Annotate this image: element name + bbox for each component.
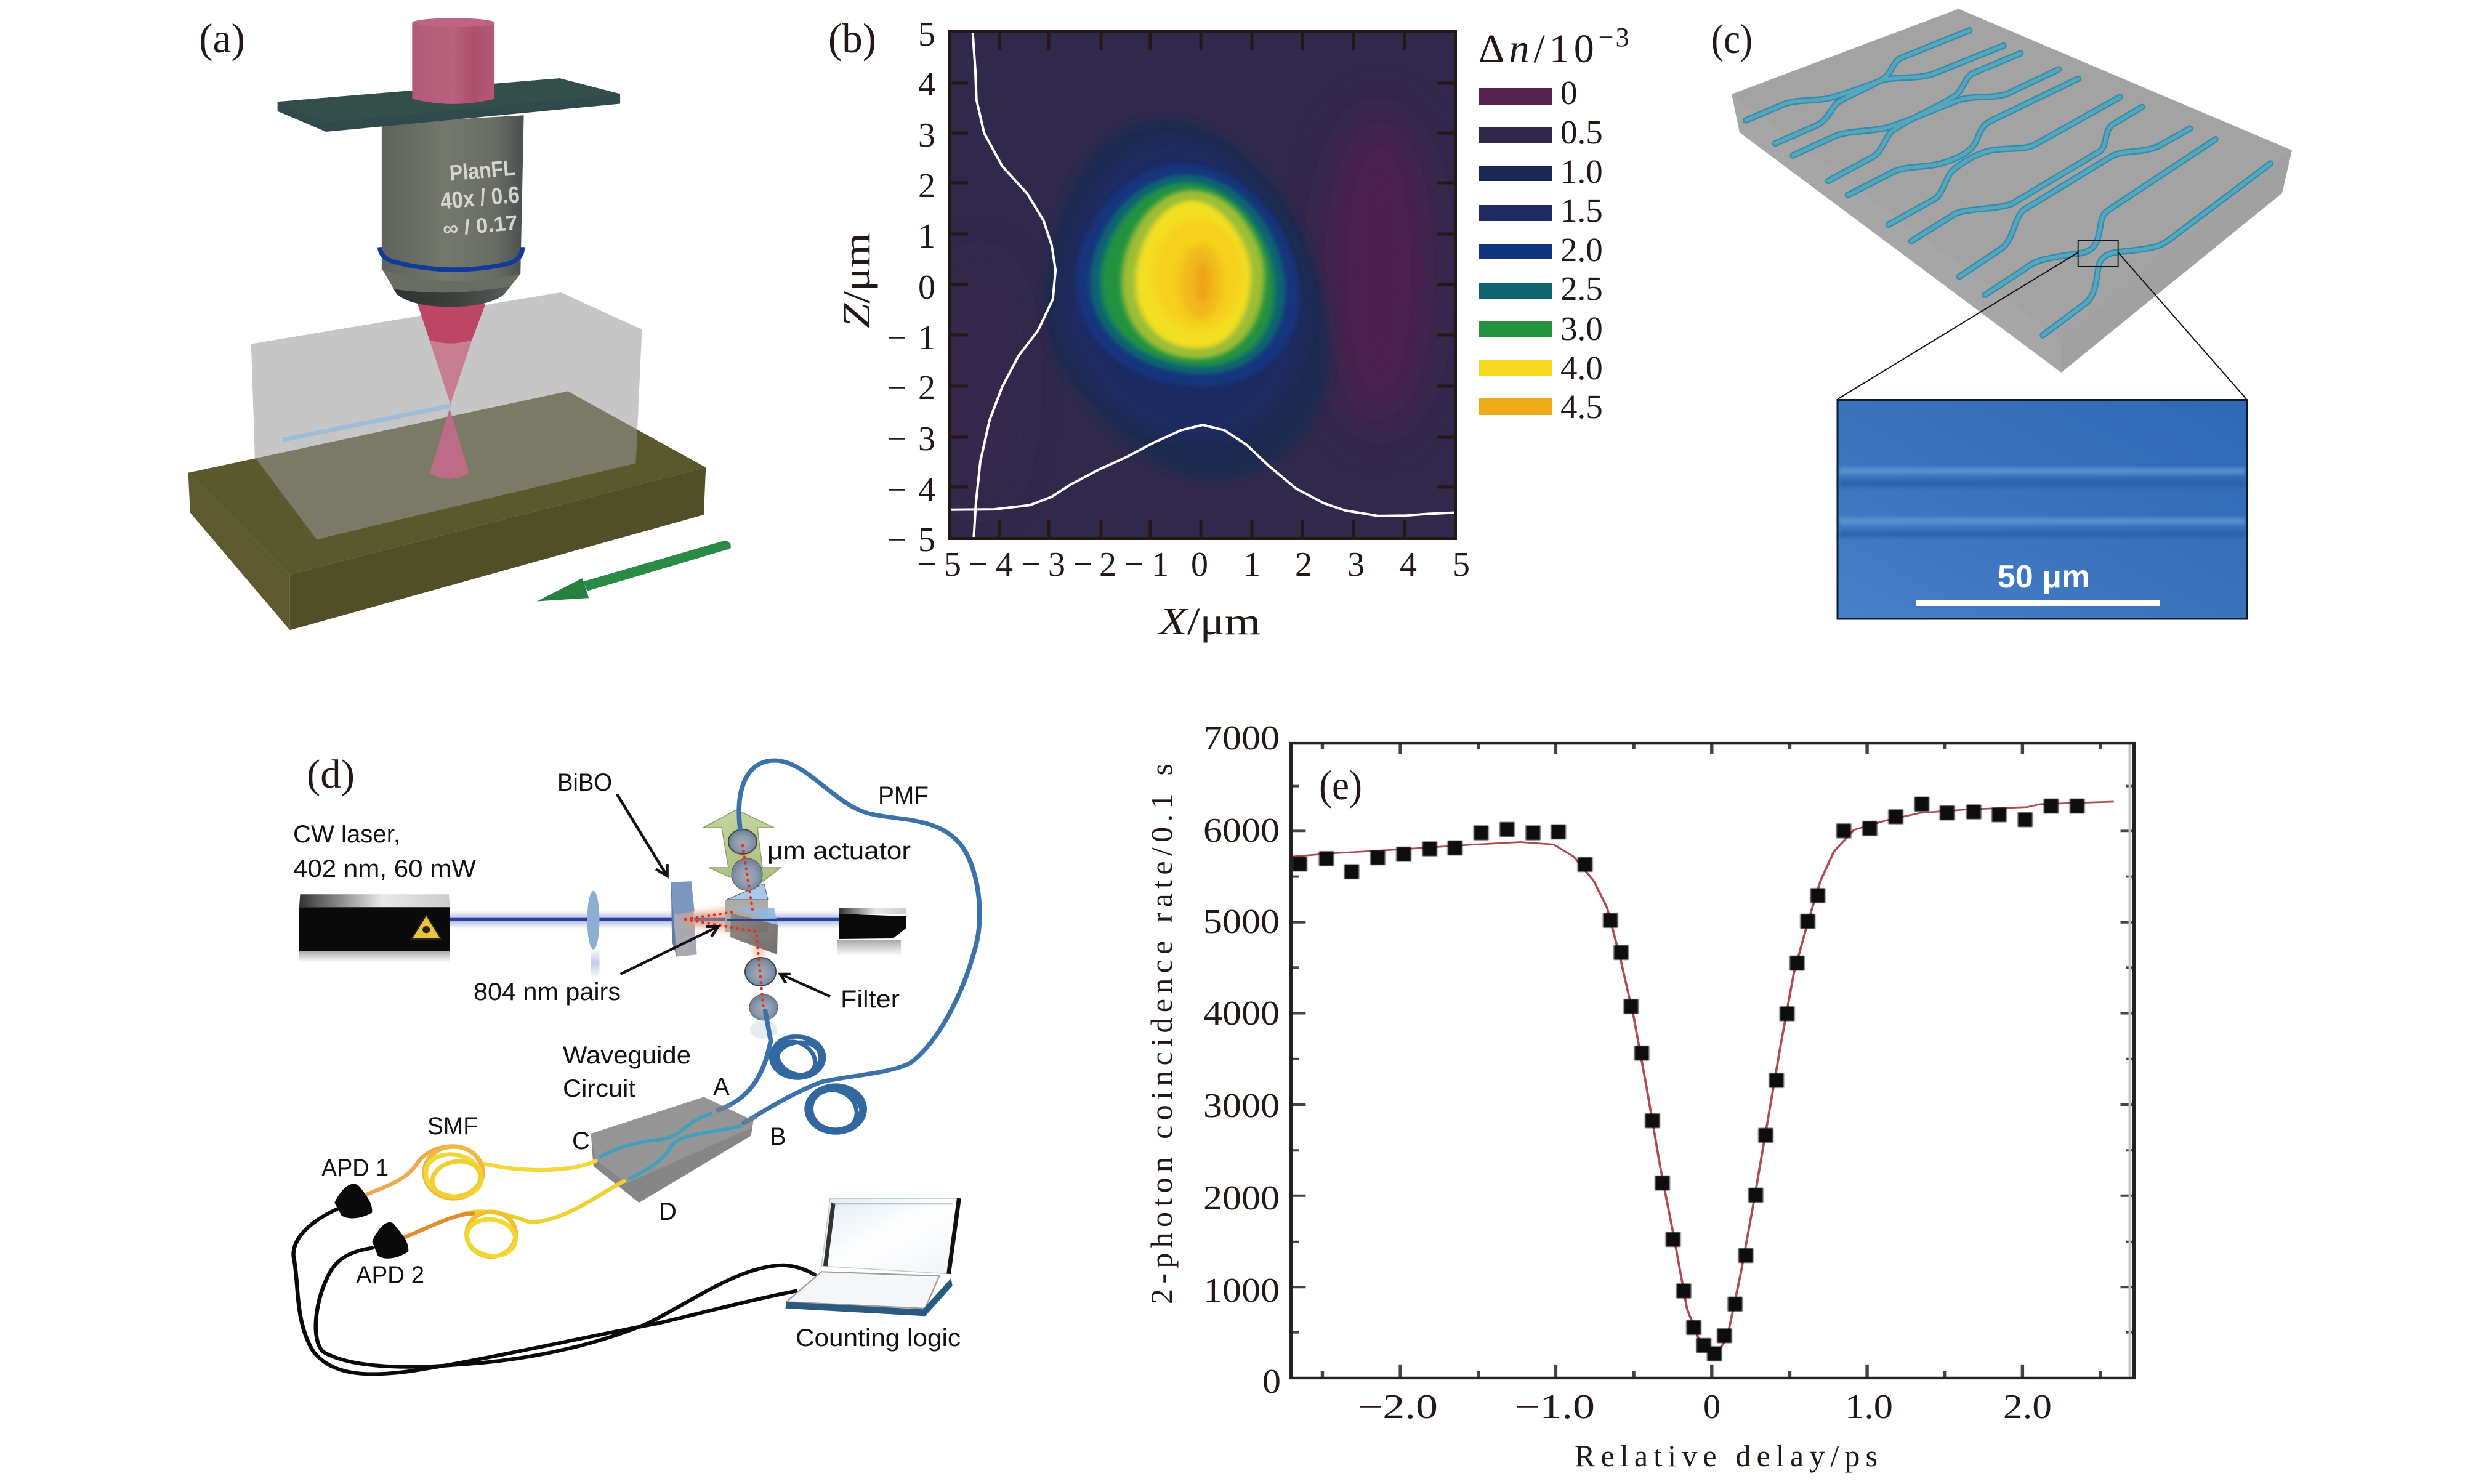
y axis tick labels: 3000 xyxy=(1203,1087,1280,1125)
laptop counting logic xyxy=(785,1198,961,1316)
Z axis tick labels: 3 xyxy=(918,116,935,155)
setup labels: APD 2 xyxy=(356,1262,424,1289)
white intensity profile curves xyxy=(948,31,1455,538)
X axis tick labels: −4 xyxy=(969,546,1013,584)
legend xyxy=(1479,22,1631,425)
804 nm photon paths xyxy=(685,845,764,1010)
focused laser beam xyxy=(418,304,485,479)
setup labels: D xyxy=(659,1198,677,1225)
PMF fibers and coils xyxy=(718,760,980,1140)
panel (a): femtosecond laser writing setup xyxy=(188,15,731,630)
y axis tick labels: 2000 xyxy=(1203,1179,1280,1217)
arrow: 804 nm pointer xyxy=(621,927,718,974)
waveguide array xyxy=(1746,30,2270,335)
setup labels: SMF xyxy=(427,1113,478,1140)
X axis tick labels: 1 xyxy=(1243,546,1261,584)
coupling lenses and filter xyxy=(728,829,778,1039)
objective engraving xyxy=(439,155,521,241)
green dichroic plate xyxy=(278,78,620,132)
black signal cables xyxy=(294,1209,815,1374)
waveguide circuit block xyxy=(591,1097,753,1203)
x axis tick labels: −2.0 xyxy=(1358,1388,1438,1426)
setup labels: μm actuator xyxy=(767,837,911,865)
focusing lens xyxy=(587,891,599,978)
setup labels: 804 nm pairs xyxy=(474,978,621,1006)
scale bar text: 50 μm xyxy=(1998,559,2090,595)
beam dump xyxy=(837,908,906,956)
Z axis tick labels: 2 xyxy=(918,167,935,205)
y axis title: 2-photon coincidence rate/0.1 s xyxy=(1144,764,1179,1304)
laser, lens and crystal on the pump line xyxy=(299,881,841,978)
panel label (c): (c) xyxy=(1711,15,1753,62)
X axis tick labels xyxy=(917,546,1470,584)
y axis tick labels: 5000 xyxy=(1203,903,1280,941)
y axis tick labels: 1000 xyxy=(1203,1272,1280,1310)
setup labels: A xyxy=(713,1073,730,1100)
microscope inset xyxy=(1838,400,2247,619)
legend values: 0 xyxy=(1560,74,1578,111)
Z axis tick labels: 4 xyxy=(918,65,935,103)
panel label (e): (e) xyxy=(1319,762,1362,809)
y axis tick labels: 6000 xyxy=(1203,812,1280,850)
stage block xyxy=(188,391,706,630)
legend swatches xyxy=(1479,88,1552,415)
x axis tick labels: 1.0 xyxy=(1845,1388,1893,1426)
objective engraving: ∞ / 0.17 xyxy=(442,211,518,241)
glass chip with waveguides xyxy=(1732,9,2292,399)
BiBO crystal xyxy=(671,881,697,957)
green translation arrow xyxy=(537,540,731,601)
fit curve xyxy=(1291,802,2114,1358)
setup labels xyxy=(293,769,961,1352)
dark outer contour xyxy=(1045,118,1330,480)
setup labels: C xyxy=(572,1127,590,1155)
legend values: 1.5 xyxy=(1560,192,1603,229)
X axis tick labels: 5 xyxy=(1453,546,1470,584)
setup labels: Counting logic xyxy=(796,1325,961,1352)
x axis tick labels: 0 xyxy=(1703,1388,1721,1426)
microscope objective xyxy=(380,115,524,307)
glass sample block xyxy=(251,292,642,539)
Z axis tick labels: 5 xyxy=(918,15,935,54)
legend values: 2.0 xyxy=(1560,231,1603,268)
contour map xyxy=(945,31,1456,539)
legend values: 2.5 xyxy=(1560,270,1603,307)
panel label (d): (d) xyxy=(307,752,355,797)
legend title: −3 xyxy=(1599,22,1631,52)
data points xyxy=(1293,797,2084,1361)
X axis title: X/μm xyxy=(1156,601,1261,643)
orange core xyxy=(1153,218,1243,331)
X axis tick labels: 0 xyxy=(1191,546,1208,584)
y axis tick labels: 0 xyxy=(1262,1363,1281,1401)
x axis tick labels: −1.0 xyxy=(1515,1388,1595,1426)
illustration: objective, sample and stage xyxy=(188,18,731,630)
X axis tick labels: −2 xyxy=(1073,546,1116,584)
mid blue contour xyxy=(1063,139,1305,441)
Z axis tick labels: −2 xyxy=(887,369,935,407)
green contour xyxy=(1095,179,1280,370)
panel (d): HOM experiment setup xyxy=(293,752,980,1374)
Z axis tick labels: −5 xyxy=(887,521,935,559)
legend title: Δn/10 xyxy=(1479,26,1599,71)
legend values: 3.0 xyxy=(1560,310,1603,347)
fiber stubs at chip ports A and B xyxy=(717,1105,756,1123)
Z axis tick labels: −1 xyxy=(887,319,935,357)
SMF fibers and coils xyxy=(368,1146,624,1260)
APD detectors xyxy=(334,1184,408,1259)
yellow contour xyxy=(1129,195,1257,353)
Z axis tick labels: −3 xyxy=(887,420,935,458)
objective engraving: 40x / 0.6 xyxy=(439,182,521,215)
photon pair glow xyxy=(685,845,760,958)
Z axis title: Z/μm xyxy=(836,233,878,328)
Z axis tick labels: −4 xyxy=(887,471,935,509)
x axis tick labels: 2.0 xyxy=(2003,1388,2052,1426)
legend values: 4.5 xyxy=(1560,388,1603,425)
setup labels: Circuit xyxy=(563,1075,635,1102)
y axis tick labels: 7000 xyxy=(1203,719,1280,757)
panel label (b): (b) xyxy=(828,15,876,62)
plot frame and ticks xyxy=(949,31,1456,539)
setup labels: APD 1 xyxy=(321,1155,389,1182)
pump beam xyxy=(450,911,841,929)
fibers, circuit, detectors and laptop xyxy=(294,760,980,1374)
Z axis tick labels: 0 xyxy=(918,268,935,307)
x axis tick labels xyxy=(1358,1388,2052,1426)
Z axis tick labels: 1 xyxy=(918,217,935,256)
y axis tick labels xyxy=(1203,719,1281,1401)
legend values xyxy=(1560,74,1603,425)
X axis tick labels: 2 xyxy=(1295,546,1312,584)
setup labels: BiBO xyxy=(557,769,612,796)
legend values: 0.5 xyxy=(1560,113,1603,151)
CW laser box xyxy=(299,894,450,962)
arrow: BiBO pointer xyxy=(617,794,668,876)
panel (b): refractive index profile map xyxy=(828,15,1631,643)
setup labels: PMF xyxy=(878,782,929,809)
X axis tick labels: 3 xyxy=(1347,546,1365,584)
ticks xyxy=(1291,743,2134,1377)
setup labels: Waveguide xyxy=(563,1042,691,1069)
X axis tick labels: 4 xyxy=(1400,546,1417,584)
arrow: filter pointer xyxy=(780,974,830,996)
zoom region box xyxy=(2078,240,2118,267)
y axis tick labels: 4000 xyxy=(1203,994,1280,1033)
setup labels: B xyxy=(770,1123,786,1150)
chart plot area xyxy=(1291,743,2134,1378)
blue contour xyxy=(1076,164,1299,387)
setup labels: CW laser, xyxy=(293,821,400,848)
plot frame xyxy=(1291,743,2134,1378)
Z axis tick labels xyxy=(887,15,935,559)
legend values: 4.0 xyxy=(1560,349,1603,387)
written waveguide xyxy=(283,406,451,440)
X axis tick labels: −3 xyxy=(1021,546,1065,584)
zoom connector lines xyxy=(1838,252,2246,399)
setup labels: 402 nm, 60 mW xyxy=(293,855,476,882)
x axis title: Relative delay/ps xyxy=(1575,1438,1878,1473)
scale bar xyxy=(1916,600,2160,606)
panel (e): HOM dip chart xyxy=(1144,719,2134,1473)
objective engraving: PlanFL xyxy=(448,155,516,186)
panel (c): waveguide chip and micrograph xyxy=(1711,9,2292,619)
incoming laser beam cylinder xyxy=(412,18,494,104)
X axis tick labels: −1 xyxy=(1124,546,1169,584)
setup labels: Filter xyxy=(841,986,900,1013)
X axis tick labels: −5 xyxy=(917,546,961,584)
actuator double arrow xyxy=(703,810,781,888)
chip body xyxy=(1732,9,2292,373)
panel label (a): (a) xyxy=(199,15,245,62)
beam splitter and prisms xyxy=(725,884,839,954)
legend values: 1.0 xyxy=(1560,153,1603,190)
